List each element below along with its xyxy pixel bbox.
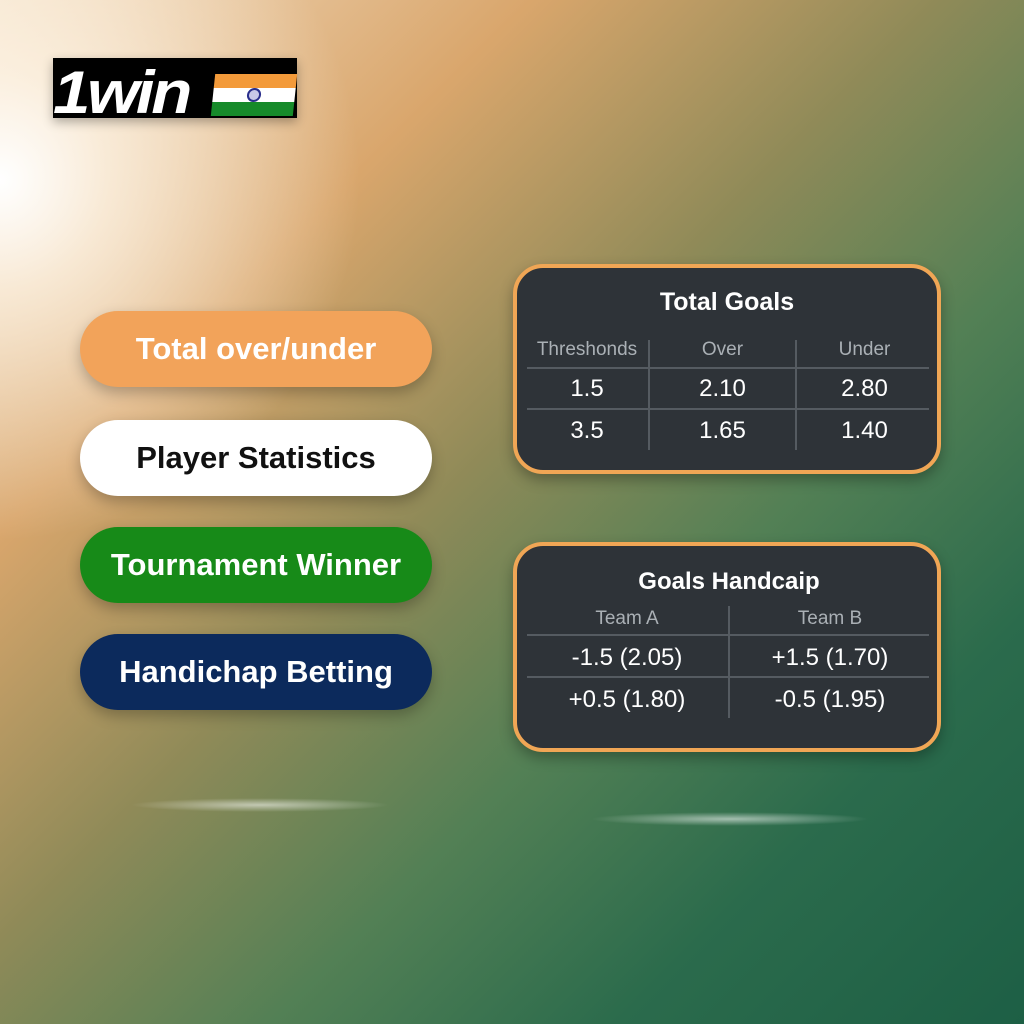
heading: Goals Handcaip	[638, 568, 820, 595]
panel: total goals: Over	[702, 339, 743, 360]
pill: handicap betting: Handichap Betting	[119, 654, 393, 689]
panel: goals handicap	[513, 542, 941, 752]
panel: goals handicap: +1.5 (1.70)	[772, 644, 888, 671]
logo	[53, 58, 297, 118]
panel: goals handicap: -0.5 (1.95)	[775, 686, 885, 713]
table	[569, 608, 888, 713]
heading: Total Goals	[660, 288, 794, 316]
panel: total goals: 3.5	[570, 417, 604, 444]
table	[537, 339, 890, 444]
pill: total over/under: Total over/under	[136, 331, 376, 366]
panel: total goals: 1.40	[841, 417, 888, 444]
pill: player statistics	[80, 420, 432, 496]
panel: goals handicap: Team A	[595, 608, 659, 629]
pill: tournament winner	[80, 527, 432, 603]
panel: total goals: Threshonds	[537, 339, 637, 360]
panel: total goals	[513, 264, 941, 474]
panel: goals handicap: Team B	[798, 608, 862, 629]
logo text: 1win	[53, 59, 189, 126]
panel: total goals: 2.10	[699, 375, 746, 402]
panel: goals handicap: -1.5 (2.05)	[572, 644, 682, 671]
pill: handicap betting	[80, 634, 432, 710]
pill: total over/under	[80, 311, 432, 387]
panel: total goals: 2.80	[841, 375, 888, 402]
panel: total goals: 1.65	[699, 417, 746, 444]
panel: total goals: 1.5	[570, 375, 604, 402]
pill: player statistics: Player Statistics	[136, 440, 376, 475]
pill: tournament winner: Tournament Winner	[111, 547, 401, 582]
icon: india flag	[210, 74, 298, 116]
panel: total goals: Under	[839, 339, 890, 360]
panel: goals handicap: +0.5 (1.80)	[569, 686, 685, 713]
